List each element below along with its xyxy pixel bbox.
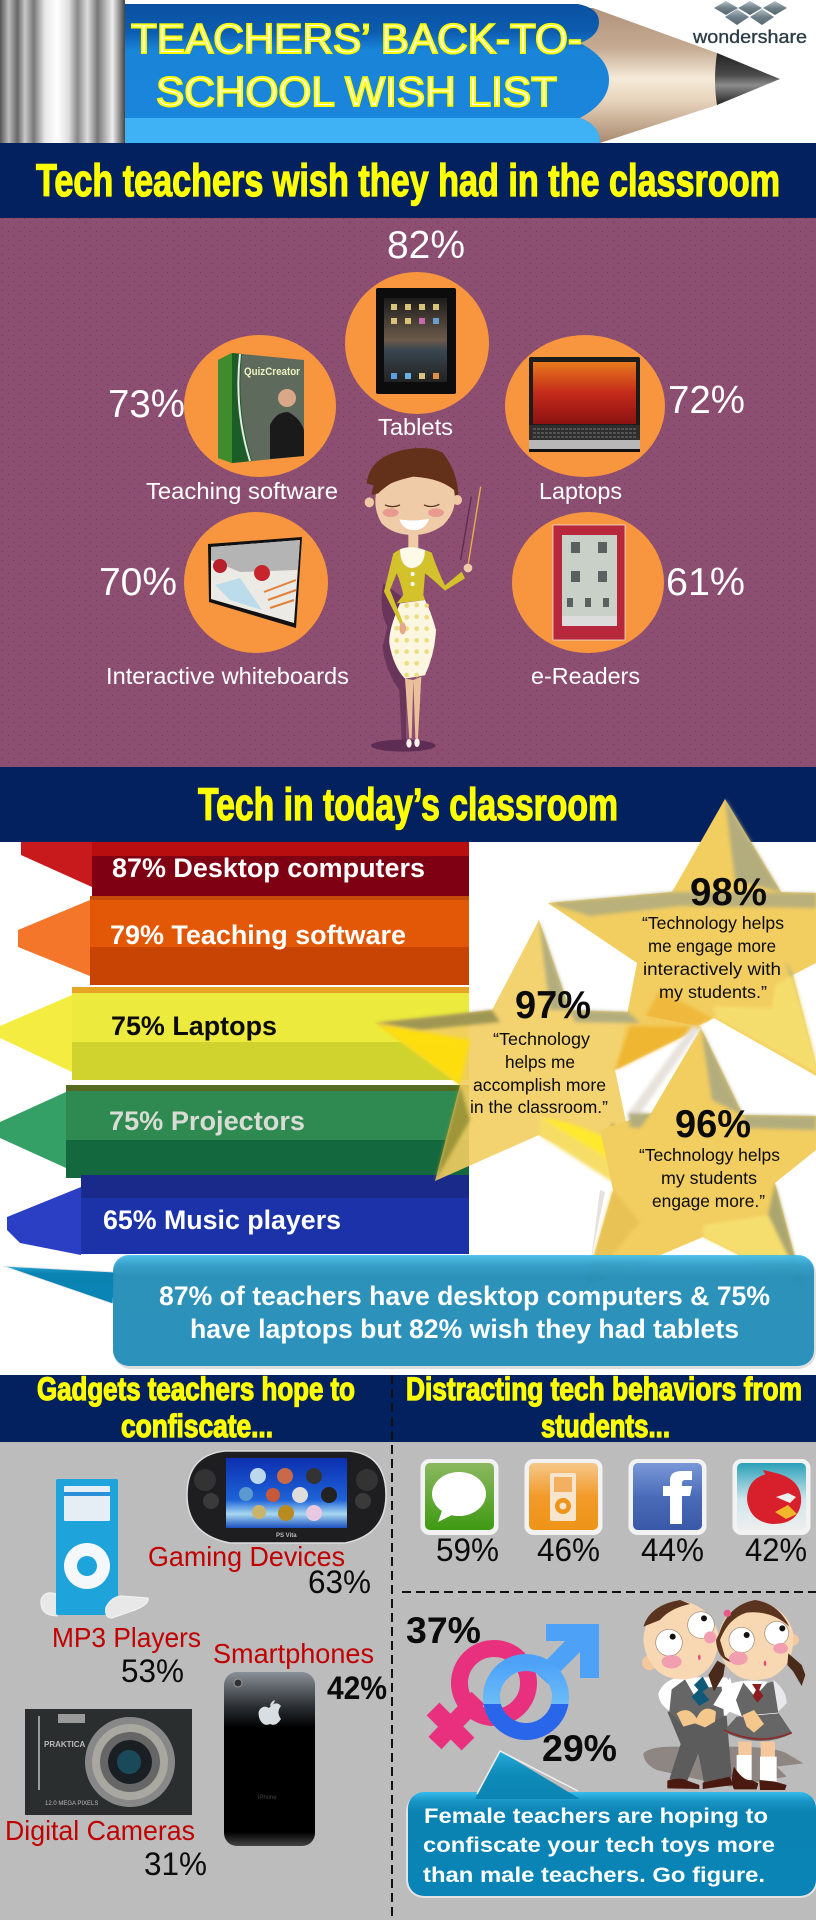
quote: 98 percent: “Technology helps [642, 913, 784, 933]
pencil light stripe [124, 118, 600, 143]
gadget: mp3 players: MP3 Players [52, 1622, 201, 1653]
icon: gender symbols: 37% [406, 1610, 481, 1651]
crayon: projectors: 75% Projectors [109, 1106, 305, 1136]
pencil blue body [124, 4, 609, 143]
quote: 97 percent: in the classroom.” [470, 1097, 608, 1117]
quote: 97 percent: 97% [515, 984, 591, 1027]
app: angry birds: 42% [745, 1532, 807, 1568]
gadget: digital cameras: Digital Cameras [5, 1815, 195, 1846]
item: interactive whiteboards: Interactive whiteboards [106, 663, 349, 689]
heading band: gadgets and behaviours: confiscate... [121, 1408, 273, 1444]
quote: 98 percent: 98% [690, 871, 767, 914]
gadget: mp3 players: 53% [121, 1653, 184, 1689]
distracting behaviours panel [406, 1459, 816, 1898]
quote: 96 percent [639, 1103, 780, 1211]
quote: 98 percent: me engage more [648, 936, 776, 956]
wondershare logo: wondershare [692, 26, 807, 47]
callout: teachers have desktops [3, 1255, 816, 1369]
item: teaching software: QuizCreator [244, 366, 301, 378]
gadget: digital cameras: PRAKTICA [44, 1740, 86, 1749]
app: messages [420, 1459, 499, 1568]
quote: 96 percent: “Technology helps [639, 1145, 780, 1165]
item: interactive whiteboards: 70% [99, 561, 177, 604]
quote: 96 percent: 96% [675, 1103, 751, 1146]
crayon bar list [0, 842, 469, 1255]
panel: gray lower section [0, 1442, 816, 1920]
heading band: today's classroom: Tech in today’s classroom [198, 779, 618, 830]
item: laptops: Laptops [539, 478, 622, 504]
pencil wood tip [570, 8, 717, 143]
quote: 96 percent: engage more.” [652, 1191, 765, 1211]
gadget: gaming devices: 63% [308, 1564, 371, 1600]
item: laptops [505, 335, 745, 504]
star: 97 percent [375, 920, 702, 1190]
app: music player [524, 1459, 602, 1568]
heading band: wish list [0, 143, 816, 218]
title [131, 15, 582, 115]
gadget: mp3 players [41, 1479, 201, 1689]
gadget: gaming devices [148, 1451, 386, 1600]
title: SCHOOL WISH LIST [156, 68, 557, 115]
item: laptops: 72% [668, 379, 745, 422]
boy [642, 1600, 740, 1789]
item: tablets: 82% [387, 224, 465, 267]
heading band: gadgets and behaviours: students... [541, 1408, 670, 1444]
crayon: music players: 65% Music players [103, 1205, 341, 1235]
gadget: smartphones: 42% [327, 1670, 387, 1706]
title: TEACHERS’ BACK-TO- [131, 15, 582, 62]
callout: female teachers [406, 1751, 816, 1898]
item: teaching software: Teaching software [146, 478, 338, 504]
quote: 98 percent: my students.” [659, 982, 767, 1002]
crayon: desktop computers: 87% Desktop computers [112, 853, 425, 883]
wondershare logo [692, 1, 807, 47]
quote: 98 percent [642, 871, 784, 1002]
pencil lead [715, 53, 780, 105]
item: e-readers: e-Readers [531, 663, 640, 689]
app: angry birds [732, 1459, 810, 1568]
icon: male symbol [492, 1624, 599, 1732]
illustration: two students [642, 1600, 805, 1790]
header: pencil with title [0, 0, 807, 143]
item: teaching software [108, 335, 338, 504]
gadget: digital cameras: 31% [144, 1846, 207, 1882]
callout: female teachers: Female teachers are hoping to [424, 1805, 768, 1828]
app: facebook [628, 1459, 706, 1568]
crayon: laptops [0, 987, 469, 1080]
gadget: digital cameras [5, 1709, 207, 1882]
gadget: smartphones: Smartphones [213, 1638, 374, 1669]
crayon: music players [7, 1175, 469, 1255]
callout: teachers have desktops: 87% of teachers have desktop computers & 75% [159, 1281, 770, 1311]
gadget: gaming devices: PS Vita [276, 1533, 297, 1539]
callout: female teachers: confiscate your tech toys more [423, 1834, 775, 1857]
heading band: today's classroom [0, 767, 816, 842]
quote: 97 percent: “Technology [493, 1029, 590, 1049]
panel: tech teachers wish for [0, 218, 816, 767]
gadget: digital cameras: 12.0 MEGA PIXELS [45, 1801, 98, 1807]
icon: female symbol [433, 1648, 528, 1744]
star: 96 percent [585, 1026, 816, 1287]
app: messages: 59% [436, 1532, 499, 1568]
pencil metal ferrule [0, 0, 125, 143]
quote: 97 percent: accomplish more [473, 1075, 606, 1095]
quote: 97 percent [470, 984, 608, 1117]
heading band: gadgets and behaviours [0, 1371, 816, 1444]
star: 98 percent [548, 799, 816, 1078]
gadget: smartphones [213, 1638, 387, 1846]
girl [708, 1600, 805, 1790]
icon: gender symbols: 29% [542, 1728, 617, 1769]
gadget: smartphones: iPhone [258, 1795, 277, 1801]
crayon: teaching software [18, 896, 469, 985]
item: interactive whiteboards [99, 512, 349, 689]
item: tablets: Tablets [378, 414, 453, 440]
app: music player: 46% [537, 1532, 600, 1568]
icon: gender symbols [406, 1610, 617, 1769]
crayon: projectors [0, 1085, 469, 1178]
teacher illustration [365, 448, 481, 752]
item: teaching software: 73% [108, 383, 185, 426]
callout: teachers have desktops: have laptops but 82% wish they had tablets [190, 1314, 739, 1344]
callout: female teachers: than male teachers. Go figure. [423, 1864, 765, 1887]
gadget: gaming devices: Gaming Devices [148, 1541, 345, 1572]
star quotes [470, 871, 784, 1211]
crayon: desktop computers [21, 842, 469, 896]
gadgets panel [5, 1451, 387, 1882]
item: e-readers: 61% [666, 561, 745, 604]
quote: 96 percent: my students [661, 1168, 757, 1188]
app: facebook: 44% [641, 1532, 704, 1568]
quote: 97 percent: helps me [505, 1052, 575, 1072]
item: e-readers [512, 512, 745, 689]
heading band: gadgets and behaviours: Gadgets teachers hope to [37, 1371, 355, 1407]
item: tablets [345, 224, 489, 440]
quote: 98 percent: interactively with [643, 959, 781, 979]
crayon: teaching software: 79% Teaching software [110, 920, 406, 950]
crayon: laptops: 75% Laptops [111, 1011, 277, 1041]
